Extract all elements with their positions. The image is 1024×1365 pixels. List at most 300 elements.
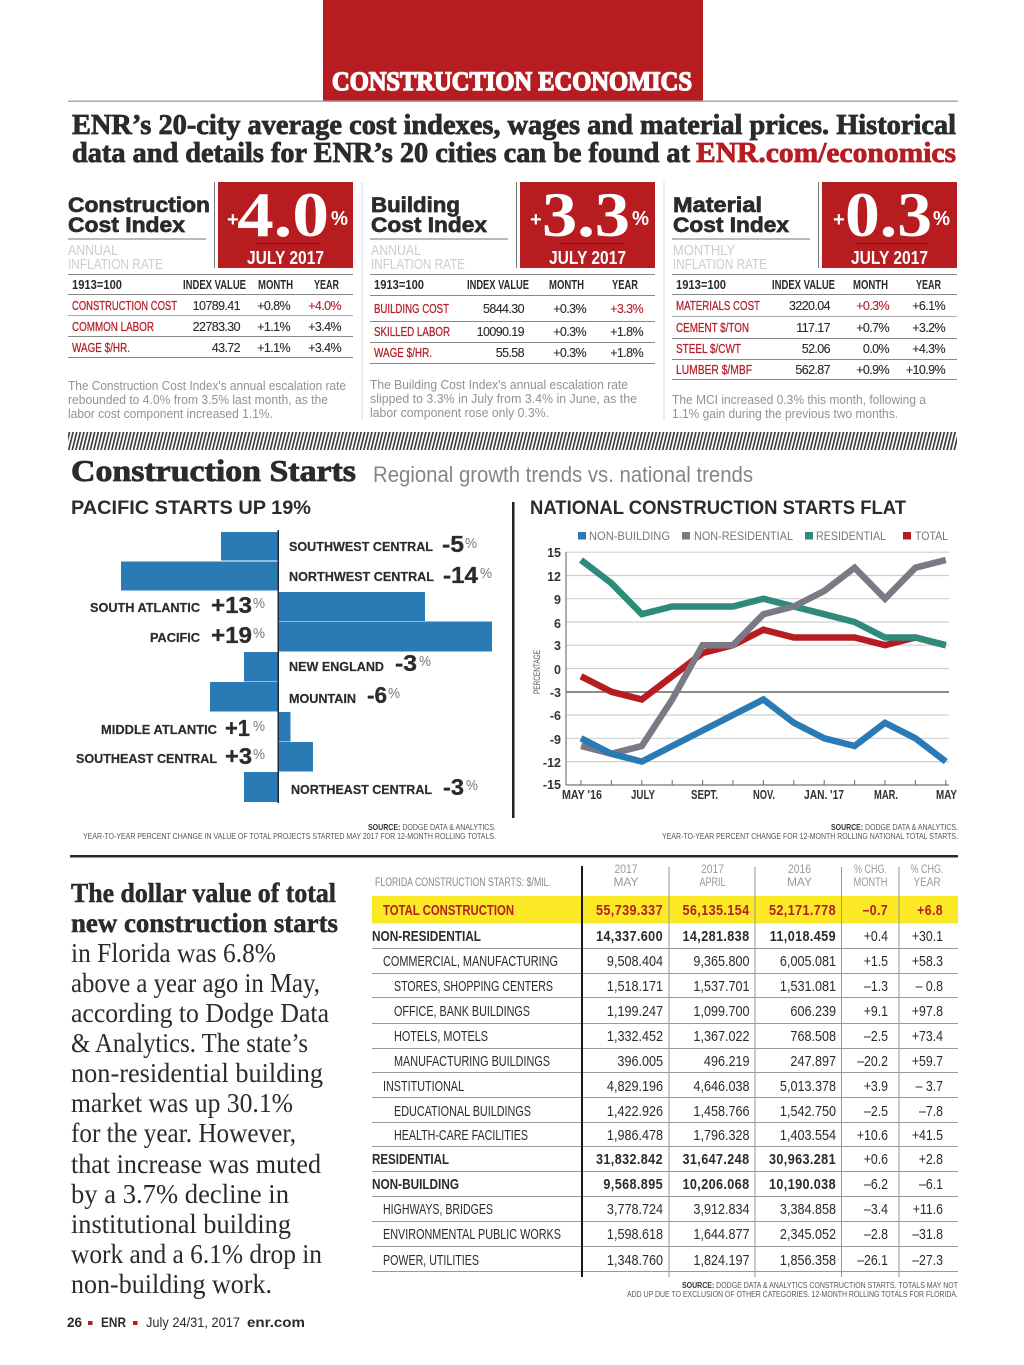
material cost description [672, 393, 926, 421]
row: commercial, manufacturing [383, 953, 943, 970]
bar labels: +1 [225, 715, 250, 741]
row: stores, shopping centers: 1,531.081 [780, 978, 836, 994]
material cost table: +3.2% [912, 321, 945, 335]
x axis labels: NOV. [753, 788, 775, 802]
building cost table: MONTH [549, 278, 584, 292]
panel: pacific starts [71, 497, 496, 841]
bar labels: +19 [211, 622, 252, 648]
row: power, utilities: –26.1 [857, 1252, 888, 1268]
row: non-building: NON-BUILDING [372, 1176, 459, 1193]
row: office, bank buildings: +97.8 [912, 1003, 943, 1019]
chart legend: RESIDENTIAL [816, 529, 886, 543]
material cost table [672, 274, 957, 380]
bar labels: PACIFIC [150, 630, 201, 645]
article text: & Analytics. The state’s [71, 1028, 308, 1058]
building cost table: +1.8% [610, 346, 643, 360]
row: stores, shopping centers: 1,518.171 [607, 978, 663, 994]
x axis labels: MAY '16 [562, 788, 602, 802]
red callout +4.0%: JULY 2017 [247, 248, 324, 268]
row: highways, bridges: 3,912.834 [693, 1201, 750, 1217]
row: environmental public works: 1,644.877 [693, 1226, 750, 1242]
source note: line chart [662, 822, 958, 841]
row: power, utilities: 1,348.760 [607, 1252, 663, 1268]
construction cost table: INDEX VALUE [183, 278, 246, 292]
article text: for the year. However, [71, 1118, 296, 1148]
x axis labels: MAR. [874, 788, 898, 802]
row: educational buildings: EDUCATIONAL BUILDINGS [394, 1103, 531, 1120]
y axis labels: 15 [547, 546, 561, 560]
construction cost table: +3.4% [308, 320, 341, 334]
row: residential: +0.6 [864, 1151, 888, 1167]
row: health-care facilities: +10.6 [857, 1127, 888, 1143]
row: environmental public works: 1,598.618 [607, 1226, 663, 1242]
row: hotels, motels: –2.5 [864, 1028, 888, 1044]
building cost table: INDEX VALUE [467, 278, 529, 292]
building cost table: BUILDING COST [374, 302, 449, 316]
red callout +0.3% [822, 179, 957, 268]
row: highways, bridges: +11.6 [913, 1201, 943, 1217]
row: environmental public works: –31.8 [912, 1226, 943, 1242]
row: non-residential [372, 928, 943, 945]
article text: new construction starts [71, 908, 338, 938]
material cost table: 3220.04 [789, 299, 831, 313]
y axis labels [532, 546, 561, 792]
material cost table: +4.3% [912, 342, 945, 356]
row: residential: RESIDENTIAL [372, 1151, 449, 1168]
x axis labels: MAY [936, 788, 958, 802]
article text: market was up 30.1% [71, 1088, 293, 1118]
building cost index title: Cost Index [371, 213, 487, 237]
row: health-care facilities: +41.5 [912, 1127, 943, 1143]
material cost table: 117.17 [796, 321, 831, 335]
material cost table: LUMBER $/MBF [676, 363, 752, 377]
building cost index title: ANNUAL [371, 242, 421, 259]
table header: % CHG. [910, 862, 944, 876]
row: non-building: 10,190.038 [769, 1176, 836, 1192]
national starts heading: NATIONAL CONSTRUCTION STARTS FLAT [530, 497, 906, 519]
y axis labels: 3 [554, 639, 561, 653]
article text: above a year ago in May, [71, 968, 320, 998]
building cost index title [370, 193, 508, 273]
building cost index title: Building [371, 193, 460, 217]
building cost table: WAGE $/HR. [374, 346, 432, 360]
row: total construction: +6.8 [917, 902, 943, 918]
row: educational buildings: –7.8 [919, 1103, 943, 1119]
row: highways, bridges [383, 1201, 943, 1218]
bar labels: SOUTHWEST CENTRAL [289, 539, 433, 554]
y axis labels: 12 [547, 570, 561, 584]
row: institutional: 4,829.196 [607, 1078, 663, 1094]
source note: line chart: YEAR-TO-YEAR PERCENT CHANGE FOR 12-MONTH ROLLING NATIONAL TOTAL STARTS. [662, 831, 958, 841]
row: commercial, manufacturing: 9,365.800 [693, 953, 750, 969]
table header: % CHG. [854, 862, 887, 876]
material cost description: The MCI increased 0.3% this month, following a [672, 393, 926, 407]
construction cost table: YEAR [314, 278, 339, 292]
article text: by a 3.7% decline in [71, 1179, 289, 1209]
material cost table: +10.9% [906, 363, 945, 377]
bar labels: % [466, 777, 478, 794]
bar labels [76, 531, 492, 800]
building cost table: 5844.30 [483, 302, 525, 316]
row: non-building: –6.2 [864, 1176, 888, 1192]
row: commercial, manufacturing: 6,005.081 [780, 953, 836, 969]
intro heading: ENR.com/economics [696, 137, 956, 169]
row: non-residential: 14,281.838 [682, 928, 750, 944]
y axis labels: -15 [543, 778, 561, 792]
red callout +3.3% [520, 179, 655, 268]
y axis labels: -9 [550, 733, 561, 747]
intro heading [72, 109, 956, 169]
building cost table: +0.3% [553, 302, 586, 316]
row: stores, shopping centers: 1,537.701 [693, 978, 750, 994]
row: environmental public works: ENVIRONMENTAL PUBLIC WORKS [383, 1226, 561, 1243]
row: total construction: TOTAL CONSTRUCTION [383, 902, 514, 919]
row: institutional [383, 1078, 943, 1095]
source note: regional chart: SOURCE: DODGE DATA & ANALYTICS. [368, 822, 496, 832]
row: power, utilities [383, 1252, 943, 1269]
construction cost table: CONSTRUCTION COST [72, 299, 177, 313]
panel: construction cost index [68, 179, 353, 421]
construction cost description: labor cost component increased 1.1%. [68, 407, 273, 421]
material cost index title: Material [673, 193, 762, 217]
panel: material cost index [672, 179, 957, 421]
row: hotels, motels: HOTELS, MOTELS [394, 1028, 488, 1045]
row: office, bank buildings [394, 1003, 943, 1020]
row: manufacturing buildings [394, 1053, 943, 1070]
row: stores, shopping centers [394, 978, 943, 995]
construction cost table: 43.72 [212, 341, 241, 355]
header banner: CONSTRUCTION ECONOMICS [332, 67, 692, 96]
construction cost index title: Cost Index [68, 213, 185, 237]
source note: florida table: ADD UP DUE TO EXCLUSION OF OTHER CATEGORIES. 12-MONTH ROLLING TOTALS FOR FLORIDA. [627, 1289, 958, 1299]
row: office, bank buildings: +9.1 [864, 1003, 888, 1019]
chart legend: TOTAL [915, 529, 948, 543]
material cost table: 0.0% [863, 342, 889, 356]
red callout +4.0%: % [331, 208, 348, 230]
red callout +0.3%: JULY 2017 [851, 248, 928, 268]
row: power, utilities: 1,856.358 [780, 1252, 836, 1268]
row: environmental public works: 2,345.052 [780, 1226, 836, 1242]
y axis labels: 6 [554, 617, 561, 631]
row: non-residential: 11,018.459 [770, 928, 836, 944]
y axis labels: -3 [550, 686, 561, 700]
table header: MAY [613, 875, 639, 889]
row: health-care facilities: HEALTH-CARE FACILITIES [394, 1127, 528, 1144]
row: total construction: 52,171.778 [769, 902, 836, 918]
bar labels: % [465, 535, 477, 552]
row: office, bank buildings: 606.239 [790, 1003, 836, 1019]
construction cost description: The Construction Cost Index's annual escalation rate [68, 379, 346, 393]
red callout +4.0%: 4.0 [237, 179, 329, 250]
row: hotels, motels [394, 1028, 943, 1045]
bar labels: +13 [211, 592, 252, 618]
row: institutional: 4,646.038 [693, 1078, 750, 1094]
material cost description: 1.1% gain during the previous two months. [672, 407, 898, 421]
row: highways, bridges: –3.4 [864, 1201, 888, 1217]
construction cost table: +1.1% [257, 320, 290, 334]
row: non-residential: +30.1 [912, 928, 943, 944]
row: health-care facilities: 1,403.554 [780, 1127, 836, 1143]
row: non-building [372, 1176, 943, 1193]
row: residential: 31,647.248 [682, 1151, 750, 1167]
construction cost description [68, 379, 346, 421]
red callout +0.3%: 0.3 [845, 179, 932, 250]
article text: in Florida was 6.8% [71, 938, 276, 968]
section heading: construction starts: Construction Starts [71, 453, 356, 488]
row: institutional: 5,013.378 [780, 1078, 836, 1094]
article text: institutional building [71, 1209, 291, 1239]
construction cost table: 1913=100 [72, 278, 122, 292]
material cost table: MONTH [853, 278, 888, 292]
line: total [581, 630, 946, 700]
row: manufacturing buildings: 496.219 [704, 1053, 750, 1069]
source note: florida table: SOURCE: DODGE DATA & ANALYTICS CONSTRUCTION STARTS. TOTALS MAY NOT [682, 1280, 958, 1290]
row: total construction [383, 902, 943, 919]
bar labels: -5 [442, 531, 464, 557]
bar labels: NORTHEAST CENTRAL [291, 782, 432, 797]
material cost table: +0.7% [856, 321, 889, 335]
material cost table: YEAR [916, 278, 941, 292]
table header: APRIL [700, 875, 726, 889]
construction cost table: 22783.30 [193, 320, 241, 334]
row: health-care facilities: 1,986.478 [607, 1127, 663, 1143]
bar labels: -6 [367, 682, 387, 708]
row: total construction: –0.7 [863, 902, 888, 918]
row: environmental public works: –2.8 [864, 1226, 888, 1242]
florida table [372, 862, 958, 1299]
building cost table: +0.3% [553, 325, 586, 339]
source note: florida table [627, 1280, 958, 1299]
row: residential [372, 1151, 943, 1168]
building cost table: +1.8% [610, 325, 643, 339]
bar labels: % [253, 595, 265, 612]
building cost table [370, 274, 655, 364]
building cost table: 1913=100 [374, 278, 424, 292]
red callout +3.3%: JULY 2017 [549, 248, 626, 268]
construction cost table: +1.1% [257, 341, 290, 355]
line: residential [581, 560, 946, 645]
building cost description: labor component rose only 0.3%. [370, 406, 549, 420]
footer: July 24/31, 2017 [146, 1314, 240, 1330]
construction cost index title: ANNUAL [68, 242, 118, 259]
row: hotels, motels: 1,367.022 [693, 1028, 750, 1044]
red callout +0.3%: + [833, 209, 845, 231]
construction cost index title: Construction [68, 193, 210, 217]
row: office, bank buildings: 1,199.247 [607, 1003, 663, 1019]
table header: YEAR [914, 875, 941, 889]
row: hotels, motels: 1,332.452 [607, 1028, 663, 1044]
table header [375, 862, 944, 889]
construction cost index title: INFLATION RATE [68, 256, 163, 273]
building cost table: 10090.19 [477, 325, 525, 339]
article text: that increase was muted [71, 1149, 321, 1179]
bar labels: -14 [443, 562, 478, 588]
line: non-building [581, 700, 946, 762]
row: manufacturing buildings: +59.7 [912, 1053, 943, 1069]
row: stores, shopping centers: STORES, SHOPPING CENTERS [394, 978, 553, 995]
row: office, bank buildings: 1,099.700 [693, 1003, 750, 1019]
row: hotels, motels: +73.4 [912, 1028, 943, 1044]
red callout +3.3%: % [632, 208, 649, 230]
bar labels: % [480, 565, 492, 582]
article text: work and a 6.1% drop in [71, 1239, 322, 1269]
bar labels: % [253, 746, 265, 763]
row: non-building: 9,568.895 [603, 1176, 663, 1192]
bar labels: -3 [395, 650, 417, 676]
row: non-building: 10,206.068 [682, 1176, 750, 1192]
article text [71, 878, 338, 1299]
building cost table: YEAR [612, 278, 638, 292]
red callout +4.0% [218, 179, 353, 268]
header banner [68, 0, 958, 102]
source note: regional chart: YEAR-TO-YEAR PERCENT CHANGE IN VALUE OF TOTAL PROJECTS STARTED MAY 2017 FOR 12-MONTH ROLLING TOTALS. [83, 831, 496, 841]
row: residential: +2.8 [919, 1151, 943, 1167]
row: health-care facilities: 1,796.328 [693, 1127, 750, 1143]
row: educational buildings: 1,542.750 [780, 1103, 836, 1119]
section heading: construction starts [71, 453, 753, 488]
building cost table: +0.3% [553, 346, 586, 360]
row: hotels, motels: 768.508 [790, 1028, 836, 1044]
row: educational buildings: –2.5 [864, 1103, 888, 1119]
intro heading: data and details for ENR’s 20 cities can be found at [72, 137, 690, 169]
row: power, utilities: 1,824.197 [693, 1252, 750, 1268]
row: highways, bridges: HIGHWAYS, BRIDGES [383, 1201, 493, 1218]
row: manufacturing buildings: MANUFACTURING BUILDINGS [394, 1053, 550, 1070]
material cost table: 562.87 [795, 363, 831, 377]
article text: non-building work. [71, 1269, 272, 1299]
footer [67, 1314, 305, 1330]
row: stores, shopping centers: –1.3 [864, 978, 888, 994]
row: non-residential: +0.4 [864, 928, 888, 944]
construction cost table [68, 274, 353, 358]
building cost table: SKILLED LABOR [374, 325, 450, 339]
source note: regional chart [83, 822, 496, 841]
construction cost table: 10789.41 [193, 299, 241, 313]
row: power, utilities: POWER, UTILITIES [383, 1252, 479, 1269]
bar labels: % [253, 718, 265, 735]
bar labels: MOUNTAIN [289, 691, 356, 706]
row: commercial, manufacturing: COMMERCIAL, MANUFACTURING [383, 953, 558, 970]
row: highways, bridges: 3,778.724 [607, 1201, 663, 1217]
article text: non-residential building [71, 1058, 323, 1088]
material cost index title: MONTHLY [673, 242, 735, 259]
red callout +4.0%: + [227, 209, 239, 231]
regional bar chart [121, 530, 492, 803]
material cost table: CEMENT $/TON [676, 321, 749, 335]
row: residential: 30,963.281 [769, 1151, 836, 1167]
red callout +3.3%: + [530, 209, 542, 231]
footer: ENR [101, 1314, 126, 1330]
bar labels: MIDDLE ATLANTIC [101, 722, 218, 737]
material cost table: +0.3% [856, 299, 889, 313]
row: educational buildings: 1,458.766 [693, 1103, 750, 1119]
article text: according to Dodge Data [71, 998, 329, 1028]
row: institutional: +3.9 [864, 1078, 888, 1094]
construction cost table: WAGE $/HR. [72, 341, 130, 355]
table header: 2016 [788, 862, 811, 876]
construction cost table: +4.0% [308, 299, 341, 313]
chart legend: NON-RESIDENTIAL [694, 529, 793, 543]
row: highways, bridges: 3,384.858 [780, 1201, 836, 1217]
row: commercial, manufacturing: +58.3 [912, 953, 943, 969]
row: institutional: – 3.7 [916, 1078, 943, 1094]
row: power, utilities: –27.3 [912, 1252, 943, 1268]
row: commercial, manufacturing: 9,508.404 [607, 953, 663, 969]
panel: building cost index [370, 179, 655, 420]
building cost description [370, 378, 637, 420]
bar labels: NORTHWEST CENTRAL [289, 569, 434, 584]
x axis labels: JULY [631, 788, 656, 802]
material cost table: +0.9% [856, 363, 889, 377]
building cost index title: INFLATION RATE [371, 256, 465, 273]
material cost table: 52.06 [802, 342, 831, 356]
red callout +0.3%: % [933, 208, 950, 230]
y axis labels: -6 [550, 709, 561, 723]
x axis labels [562, 788, 958, 802]
construction cost table: COMMON LABOR [72, 320, 154, 334]
panel: national construction starts [530, 497, 958, 841]
material cost table: STEEL $/CWT [676, 342, 741, 356]
material cost index title: INFLATION RATE [673, 256, 767, 273]
intro heading: ENR’s 20-city average cost indexes, wages and material prices. Historical [72, 109, 956, 141]
construction cost table: MONTH [258, 278, 293, 292]
chart legend: NON-BUILDING [589, 529, 670, 543]
building cost table: +3.3% [610, 302, 643, 316]
y axis labels: PERCENTAGE [532, 650, 542, 694]
construction cost table: +3.4% [308, 341, 341, 355]
source note: line chart: SOURCE: DODGE DATA & ANALYTICS. [831, 822, 958, 832]
table header: 2017 [614, 862, 638, 876]
bar labels: -3 [443, 774, 464, 800]
row: institutional: INSTITUTIONAL [383, 1078, 464, 1095]
y axis labels: 0 [554, 663, 561, 677]
bar labels: +3 [225, 743, 252, 769]
building cost description: slipped to 3.3% in July from 3.4% in June, as the [370, 392, 637, 406]
row: manufacturing buildings: –20.2 [857, 1053, 888, 1069]
row: educational buildings: 1,422.926 [607, 1103, 663, 1119]
material cost index title [672, 193, 810, 273]
bar labels: % [253, 625, 265, 642]
row: total construction: 55,739.337 [596, 902, 663, 918]
bar labels: % [388, 685, 400, 702]
bar labels: SOUTHEAST CENTRAL [76, 751, 217, 766]
pacific starts heading: PACIFIC STARTS UP 19% [71, 497, 311, 519]
bar labels: % [419, 653, 431, 670]
row: non-residential: 14,337.600 [596, 928, 663, 944]
row: non-residential: NON-RESIDENTIAL [372, 928, 481, 945]
chart legend [578, 529, 948, 543]
y axis labels: 9 [554, 593, 561, 607]
x axis labels: SEPT. [691, 788, 718, 802]
line: non-residential [581, 560, 946, 754]
row: office, bank buildings: OFFICE, BANK BUILDINGS [394, 1003, 530, 1020]
footer: enr.com [247, 1314, 305, 1330]
row: manufacturing buildings: 396.005 [617, 1053, 663, 1069]
table header: FLORIDA CONSTRUCTION STARTS: $/MIL. [375, 877, 551, 889]
building cost table: 55.58 [496, 346, 525, 360]
material cost table: MATERIALS COST [676, 299, 760, 313]
row: manufacturing buildings: 247.897 [790, 1053, 836, 1069]
table header: MAY [787, 875, 812, 889]
bar labels: SOUTH ATLANTIC [90, 600, 201, 615]
material cost table: +6.1% [912, 299, 945, 313]
table header: 2017 [701, 862, 724, 876]
construction cost description: rebounded to 4.0% from 3.5% last month, as the [68, 393, 328, 407]
building cost description: The Building Cost Index's annual escalation rate [370, 378, 628, 392]
article text: The dollar value of total [71, 878, 336, 908]
row: health-care facilities [394, 1127, 943, 1144]
y axis labels: -12 [543, 756, 561, 770]
